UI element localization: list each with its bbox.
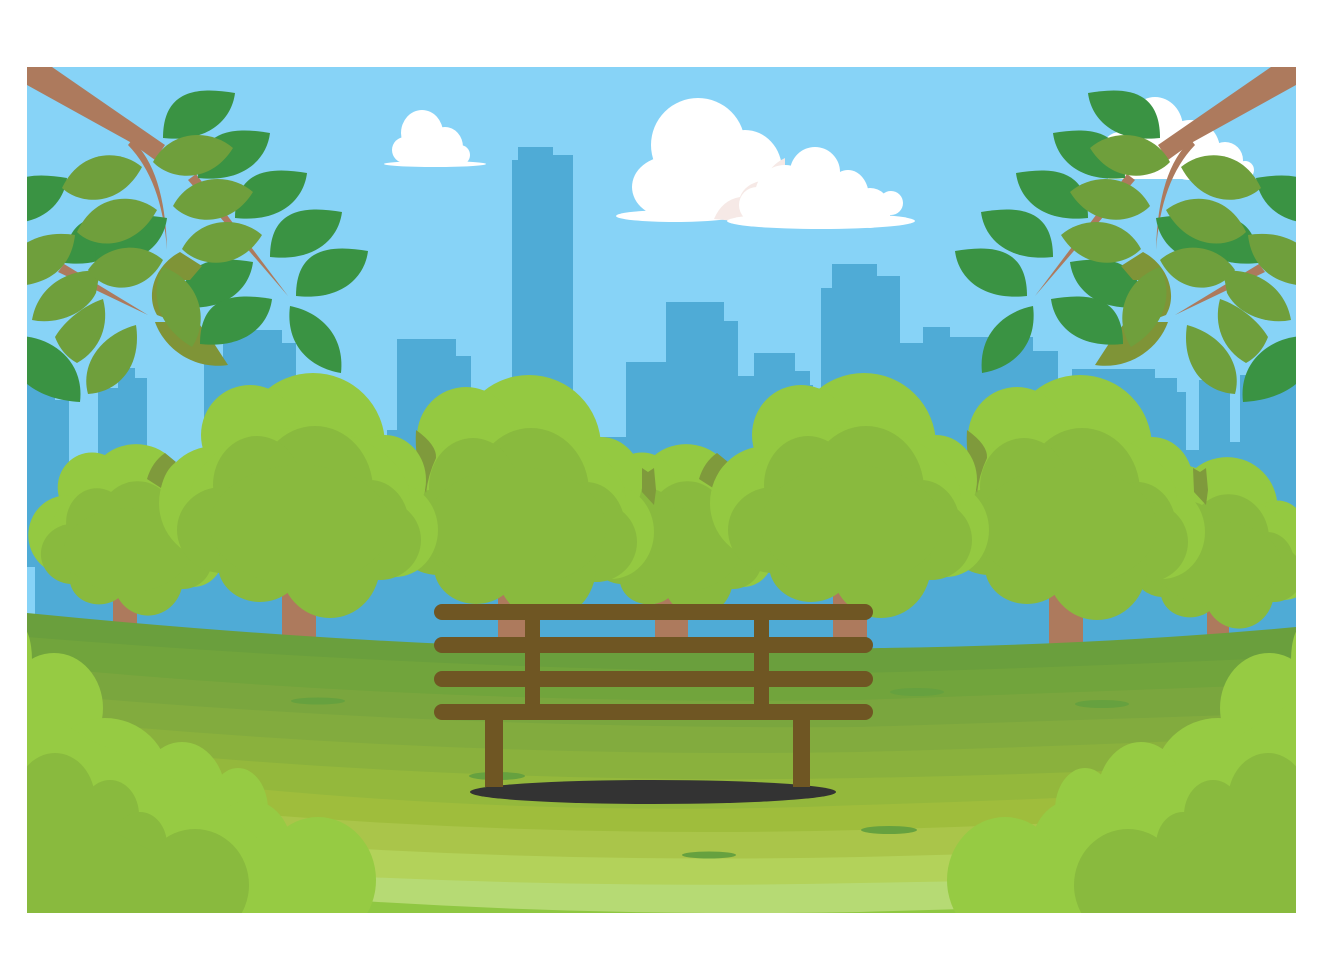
cloud: small left — [384, 110, 486, 167]
tree: right — [966, 375, 1205, 620]
tree: small centre — [608, 444, 768, 604]
tree: large centre right — [710, 373, 989, 618]
park bench — [434, 604, 873, 787]
tree: small far right — [1142, 457, 1296, 629]
tree: small left — [28, 444, 224, 616]
cloud: centre right — [714, 147, 915, 229]
cloud: behind right branch — [1102, 97, 1254, 180]
foreground bush: left — [27, 632, 376, 913]
sky — [27, 67, 1296, 667]
bench shadow — [470, 780, 836, 804]
foliage shadows — [147, 430, 1208, 505]
tree trunks — [113, 593, 1229, 644]
cloud: large centre left — [616, 98, 782, 222]
lawn bands — [27, 613, 1296, 913]
tree: large left — [159, 373, 438, 618]
branch with leaves: left — [0, 67, 368, 402]
city skyline — [27, 147, 1296, 650]
tree: centre left — [416, 375, 654, 604]
branch with leaves: right — [955, 67, 1323, 402]
grass patches — [291, 688, 1129, 858]
foreground bush: right — [947, 632, 1296, 913]
